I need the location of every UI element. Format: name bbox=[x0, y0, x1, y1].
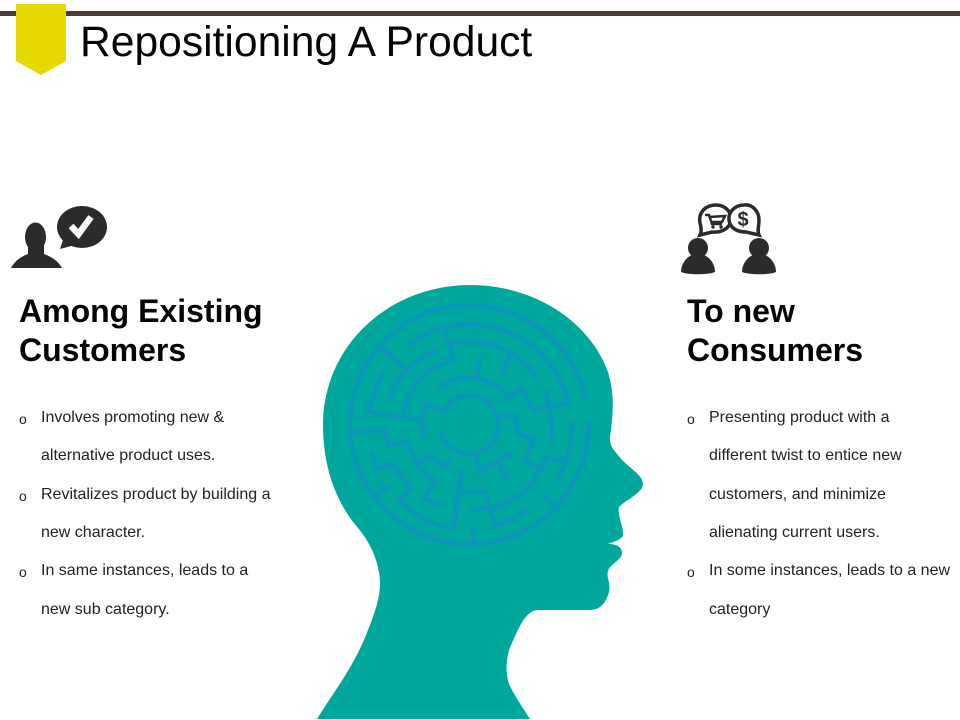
bullet list: new consumers: customers, and minimize bbox=[709, 486, 886, 503]
header rule bbox=[0, 11, 960, 16]
dollar glyph: $ bbox=[737, 209, 749, 231]
heading: among existing customers: Customers bbox=[19, 332, 186, 368]
maze bbox=[350, 305, 589, 545]
bullet list: new consumers: o bbox=[687, 411, 695, 427]
icon: two people with cart and dollar speech bubbles bbox=[681, 203, 776, 274]
icon: yellow ribbon bbox=[16, 4, 66, 75]
bullet list: new consumers: different twist to entice new bbox=[709, 447, 902, 464]
panel: to new consumers bbox=[687, 293, 950, 618]
panel: among existing customers bbox=[19, 293, 271, 618]
heading: to new consumers bbox=[687, 293, 863, 368]
cart glyph bbox=[705, 215, 725, 224]
bullet list: existing customers: o bbox=[19, 411, 27, 427]
heading: among existing customers bbox=[19, 293, 263, 368]
bullet list: new consumers: category bbox=[709, 601, 770, 618]
head silhouette bbox=[317, 285, 643, 719]
bullet list: existing customers: new sub category. bbox=[41, 601, 170, 618]
bullet list: new consumers: o bbox=[687, 564, 695, 580]
bullet list: existing customers: Revitalizes product by building a bbox=[41, 486, 270, 503]
heading: to new consumers: To new bbox=[687, 293, 795, 329]
bullet list: existing customers: Involves promoting new & bbox=[41, 409, 224, 426]
bullet list: new consumers: Presenting product with a bbox=[709, 409, 890, 426]
bullet list: existing customers: In same instances, leads to a bbox=[41, 562, 248, 579]
bullet list: new consumers: In some instances, leads to a new bbox=[709, 562, 950, 579]
bullet list: existing customers: o bbox=[19, 564, 27, 580]
icon: person with check speech bubble bbox=[11, 206, 107, 268]
bullet list: existing customers: alternative product uses. bbox=[41, 447, 215, 464]
heading: among existing customers: Among Existing bbox=[19, 293, 263, 329]
bullet list: existing customers: new character. bbox=[41, 524, 145, 541]
bullet list: new consumers: alienating current users. bbox=[709, 524, 880, 541]
bullet list: existing customers: o bbox=[19, 488, 27, 504]
bullet list: new consumers bbox=[687, 409, 950, 618]
title: Repositioning A Product bbox=[80, 18, 532, 66]
heading: to new consumers: Consumers bbox=[687, 332, 863, 368]
bullet list: existing customers bbox=[19, 409, 271, 618]
